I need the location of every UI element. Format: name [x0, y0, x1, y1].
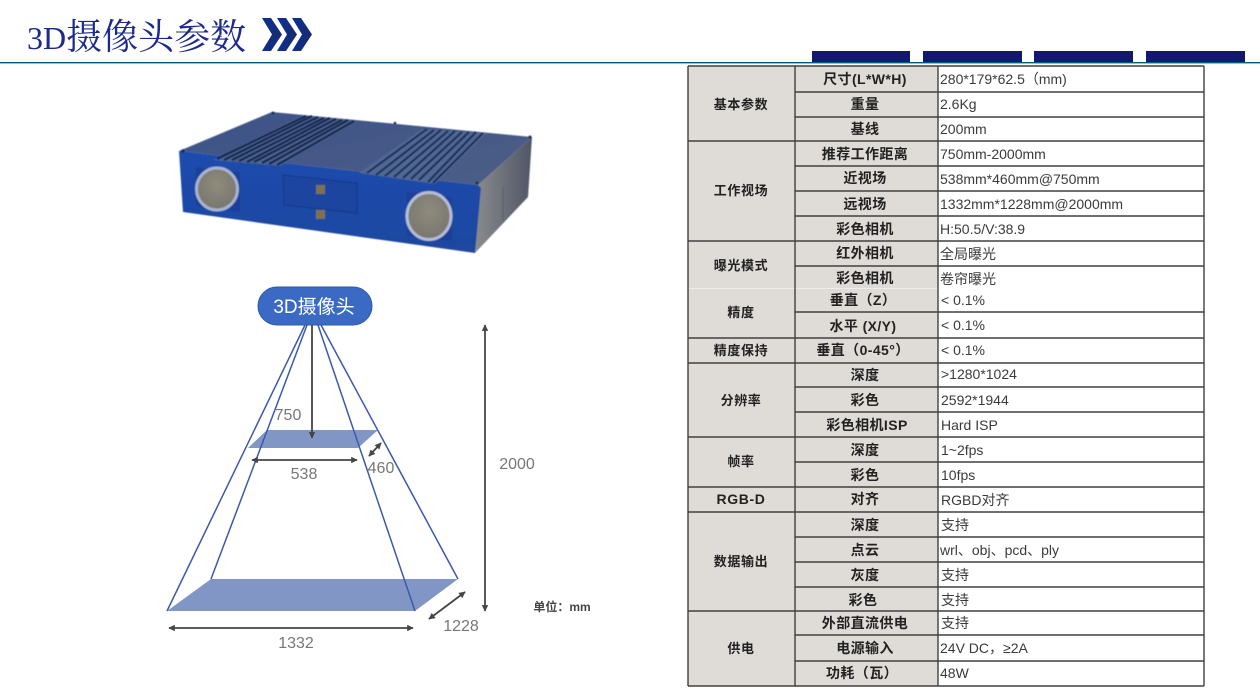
heat sink right [359, 129, 487, 184]
group: 数据输出: 彩色 [849, 592, 877, 608]
group: 曝光模式: 彩色相机 [836, 270, 894, 286]
group: 供电: 功耗（瓦） [826, 665, 898, 681]
group: RGB-D: 对齐 [851, 491, 879, 507]
group: 曝光模式: 全局曝光 [940, 246, 996, 262]
label 460: 460 [368, 460, 394, 477]
group: 基本参数 [714, 71, 1067, 137]
far plane [167, 579, 458, 611]
arrow: near distance [311, 325, 313, 438]
frustum lines [167, 325, 458, 611]
group: 数据输出: 点云 [851, 542, 879, 558]
group: 分辨率: 彩色 [851, 392, 879, 408]
group: 工作视场: 工作视场 [714, 183, 768, 198]
unit note: 单位：mm [533, 599, 591, 614]
lens left [196, 167, 240, 212]
group: 工作视场: H:50.5/V:38.9 [940, 221, 1025, 237]
group: 基本参数: 基线 [851, 121, 879, 137]
group: 帧率 [727, 442, 983, 483]
group: 数据输出: 灰度 [851, 567, 879, 583]
group: 数据输出: 支持 [941, 517, 969, 533]
group: 供电: 支持 [941, 615, 969, 631]
group: 精度 [727, 292, 985, 334]
group: 工作视场: 750mm-2000mm [940, 146, 1046, 162]
group: 供电: 供电 [727, 641, 755, 656]
group: 工作视场: 远视场 [843, 196, 887, 212]
group: 工作视场 [714, 146, 1123, 237]
group: 基本参数: 280*179*62.5（mm) [940, 71, 1067, 87]
group: 数据输出: wrl、obj、pcd、ply [939, 542, 1059, 558]
group: 精度: 水平 (X/Y) [830, 318, 896, 334]
group: 工作视场: 彩色相机 [836, 221, 894, 237]
group: 供电: 外部直流供电 [822, 615, 908, 631]
center panel [283, 175, 357, 219]
parameter table [688, 66, 1204, 686]
group: 帧率: 深度 [851, 442, 879, 458]
group: 精度保持 [714, 342, 985, 358]
group: 分辨率: 分辨率 [721, 393, 761, 408]
arrow: near width [252, 459, 357, 461]
group: 分辨率: >1280*1024 [941, 366, 1017, 382]
group: 供电: 24V DC，≥2A [940, 640, 1028, 656]
header tabs [812, 51, 1245, 62]
lens right [407, 192, 452, 241]
arrow: far width [169, 627, 413, 629]
group: 精度: < 0.1% [941, 292, 985, 308]
arrow: near depth [369, 443, 381, 456]
header [0, 17, 1260, 63]
group: 供电 [727, 615, 1028, 681]
label 750: 750 [275, 407, 301, 424]
camera pill: 3D摄像头 [273, 296, 355, 318]
group: 分辨率 [721, 366, 1017, 433]
group: 曝光模式: 曝光模式 [714, 258, 768, 273]
group: 数据输出: 支持 [941, 592, 969, 608]
group: 曝光模式: 红外相机 [836, 245, 894, 261]
group: 分辨率: 2592*1944 [941, 392, 1009, 408]
group: 曝光模式 [714, 245, 996, 287]
group: 数据输出 [714, 517, 1059, 608]
group: 基本参数: 尺寸(L*W*H) [823, 71, 907, 87]
group: 分辨率: 彩色相机ISP [826, 417, 908, 433]
field of view diagram [167, 287, 591, 652]
group: 工作视场: 1332mm*1228mm@2000mm [940, 196, 1123, 212]
group: RGB-D [717, 491, 1009, 508]
group: 供电: 电源输入 [836, 640, 894, 656]
group: 基本参数: 重量 [851, 96, 879, 112]
arrow: far depth [429, 592, 465, 619]
group: 分辨率: 深度 [851, 367, 879, 383]
title: 3D摄像头参数 [27, 17, 246, 57]
label 538: 538 [291, 466, 317, 483]
label 1228: 1228 [443, 618, 479, 635]
group: 数据输出: 支持 [941, 567, 969, 583]
group: 供电: 48W [940, 665, 970, 681]
group: 帧率: 彩色 [851, 467, 879, 483]
camera pill [258, 287, 372, 325]
group: 精度保持: 精度保持 [714, 343, 768, 358]
group: 精度: 精度 [727, 305, 755, 320]
group: 工作视场: 推荐工作距离 [822, 146, 908, 162]
heat sink left [213, 115, 357, 166]
group: 帧率: 1~2fps [941, 442, 983, 458]
group: 基本参数: 2.6Kg [940, 96, 977, 112]
group: RGB-D: RGBD对齐 [941, 492, 1009, 508]
label 1332: 1332 [278, 635, 314, 652]
group: 工作视场: 近视场 [843, 170, 887, 186]
group: 工作视场: 538mm*460mm@750mm [940, 171, 1100, 187]
group: 分辨率: Hard ISP [941, 417, 998, 433]
group: 基本参数: 200mm [940, 121, 987, 137]
group: RGB-D: RGB-D [717, 491, 765, 507]
group: 精度: < 0.1% [941, 317, 985, 333]
group: 数据输出: 数据输出 [714, 554, 768, 569]
group: 精度: 垂直（Z） [830, 292, 896, 308]
label 2000: 2000 [499, 456, 535, 473]
arrow: far distance [484, 325, 486, 611]
group: 数据输出: 深度 [851, 517, 879, 533]
group: 精度保持: < 0.1% [941, 342, 985, 358]
group: 曝光模式: 卷帘曝光 [940, 271, 996, 287]
group: 精度保持: 垂直（0-45°） [816, 342, 910, 358]
group: 帧率: 帧率 [727, 454, 755, 469]
product image: 3D camera [179, 112, 532, 253]
group: 基本参数: 基本参数 [714, 97, 768, 112]
group: 帧率: 10fps [941, 467, 975, 483]
near plane [248, 430, 378, 448]
screws [181, 112, 531, 184]
icon: triple chevron [262, 18, 312, 51]
